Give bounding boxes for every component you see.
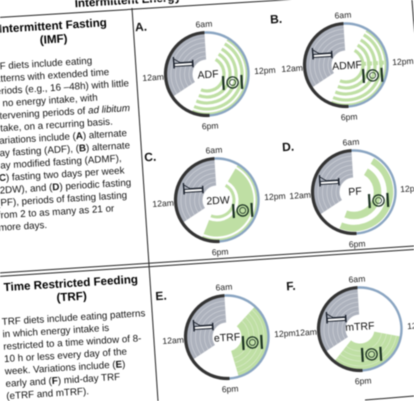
panel C: 2DW: 6pm bbox=[212, 246, 229, 257]
panel D: PF: 6pm bbox=[349, 238, 366, 249]
panel E: eTRF: 6pm bbox=[222, 383, 239, 394]
panel A: ADF bbox=[135, 12, 279, 135]
panel F: mTRF: 12am bbox=[295, 327, 317, 338]
green eating window: eTRF bbox=[172, 282, 282, 392]
panel D: PF bbox=[282, 132, 414, 253]
panel B: ADMF: 6am bbox=[334, 10, 352, 21]
panel B: ADMF: 6pm bbox=[341, 111, 358, 122]
panel A: ADF: 6pm bbox=[202, 120, 219, 131]
panel D: PF: PF bbox=[348, 186, 362, 198]
heading: Time Restricted Feeding bbox=[3, 273, 139, 308]
text: TRF description: early and (F) mid-day TRF bbox=[5, 372, 120, 390]
panel C: 2DW bbox=[144, 141, 289, 261]
panel B: ADMF bbox=[270, 4, 414, 126]
text: IMF description: (PF), periods of fasting lasting bbox=[0, 190, 127, 209]
panel B: ADMF: 12am bbox=[281, 63, 303, 74]
text: TRF description bbox=[1, 308, 150, 401]
text: IMF description: (2DW), and (D) periodic fasting bbox=[0, 178, 132, 197]
green eating window: mTRF bbox=[312, 281, 408, 377]
green fasting arcs: PF bbox=[301, 139, 407, 245]
text: TRF description: TRF diets include eating patterns bbox=[2, 308, 146, 328]
panel A: ADF: ADF bbox=[197, 68, 219, 82]
text: IMF description bbox=[0, 54, 138, 234]
panel E: eTRF: 12am bbox=[162, 335, 184, 346]
text: TRF description: 10 h or less every day of the bbox=[4, 347, 128, 365]
panel F: mTRF: 6pm bbox=[355, 375, 372, 386]
text: IMF description: from 2 to as many as 21 or bbox=[0, 203, 115, 222]
panel F: mTRF: 6am bbox=[348, 274, 366, 285]
panel F: mTRF: mTRF bbox=[345, 320, 375, 334]
heading: Intermittent Fasting bbox=[0, 16, 108, 49]
panel E: eTRF: 6am bbox=[215, 282, 233, 293]
text: TRF description: week. Variations include (E) bbox=[4, 359, 126, 378]
text: TRF description: restricted to a time window of 8- bbox=[3, 333, 142, 353]
panel C: 2DW: 6am bbox=[205, 145, 223, 156]
panel F: mTRF bbox=[286, 270, 414, 390]
heading: Time Restricted Feeding: (TRF) bbox=[56, 290, 87, 304]
panel C: 2DW: 2DW bbox=[206, 194, 230, 208]
panel E: eTRF: eTRF bbox=[214, 331, 241, 345]
heading: Time Restricted Feeding: Time Restricted Feeding bbox=[3, 273, 138, 294]
heading: Intermittent Fasting: (IMF) bbox=[39, 32, 68, 47]
panel E: eTRF: E. bbox=[155, 289, 167, 303]
panel D: PF: 12am bbox=[289, 190, 311, 201]
panel C: 2DW: C. bbox=[144, 150, 157, 164]
panel C: 2DW: 12pm bbox=[264, 191, 286, 202]
green fasting arcs: 2DW bbox=[159, 142, 275, 258]
panel A: ADF: 6am bbox=[195, 19, 213, 30]
panel F: mTRF: F. bbox=[286, 279, 296, 293]
panel B: ADMF: ADMF bbox=[332, 59, 362, 73]
panel B: ADMF: B. bbox=[270, 12, 282, 27]
panel D: PF: 6am bbox=[342, 137, 360, 148]
panel D: PF: D. bbox=[282, 140, 295, 154]
panel A: ADF: A. bbox=[135, 20, 147, 34]
panel C: 2DW: 12am bbox=[152, 198, 174, 209]
panel A: ADF: 12pm bbox=[254, 65, 276, 76]
panel E: eTRF bbox=[155, 278, 299, 398]
panel B: ADMF: 12pm bbox=[392, 56, 414, 67]
panel E: eTRF: 12pm bbox=[274, 328, 296, 339]
text: TRF description: in which energy intake is bbox=[2, 323, 110, 340]
heading: Intermittent Fasting: Intermittent Fasting bbox=[0, 16, 107, 36]
panel A: ADF: 12am bbox=[142, 72, 164, 83]
